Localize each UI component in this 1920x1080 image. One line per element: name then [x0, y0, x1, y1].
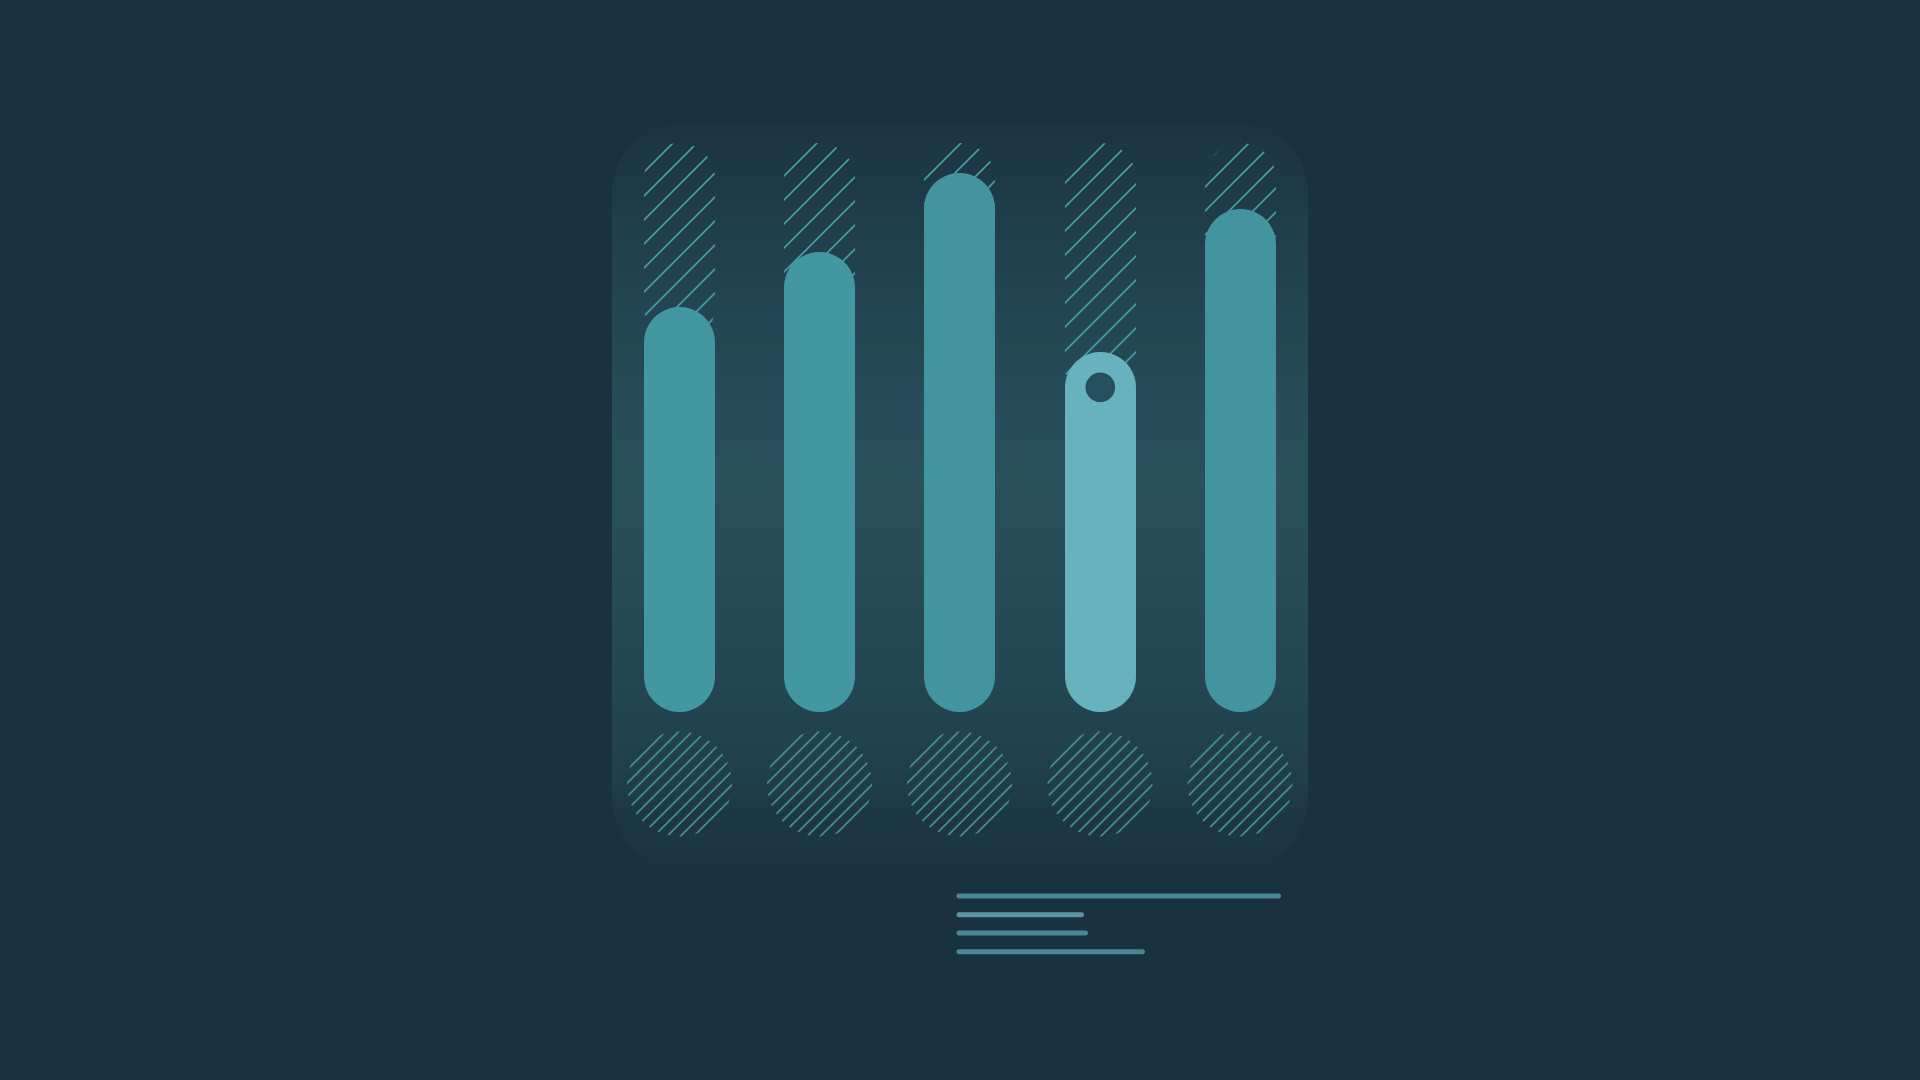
bar 3 — [924, 173, 995, 712]
bar 4 highlighted — [1065, 352, 1136, 712]
bar 4 marker dot — [1086, 372, 1115, 402]
bar 2 — [784, 252, 855, 712]
hatched circle 5 — [1188, 732, 1292, 836]
bar 5 — [1205, 209, 1276, 712]
panel: chart backdrop — [612, 122, 1308, 870]
hatched circle 3 — [907, 732, 1012, 836]
hatched tracks — [644, 143, 1276, 403]
bar 1 — [644, 307, 715, 712]
infographic canvas — [612, 143, 1308, 954]
hatched circle 4 — [1048, 732, 1152, 836]
hatched circle 2 — [767, 732, 872, 836]
legend lines — [956, 894, 1281, 954]
hatched circle 1 — [627, 732, 732, 836]
